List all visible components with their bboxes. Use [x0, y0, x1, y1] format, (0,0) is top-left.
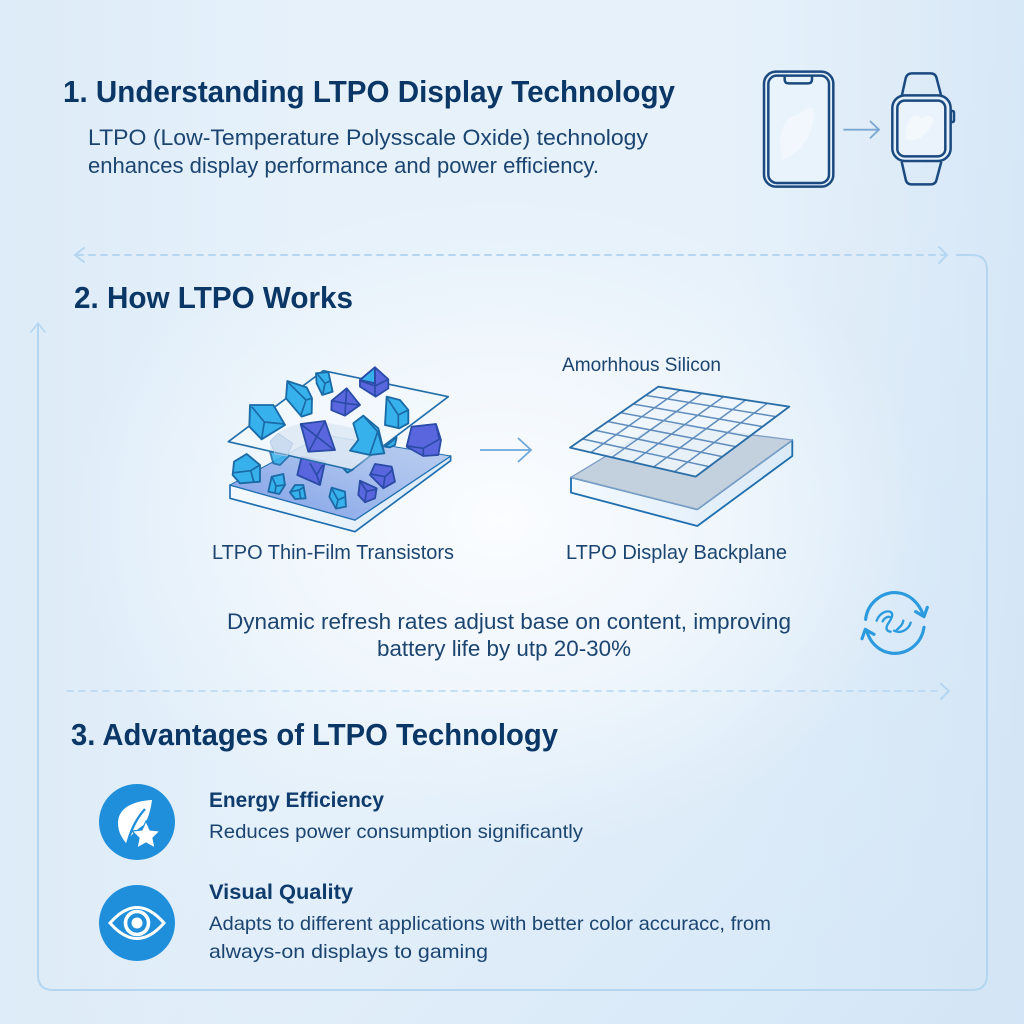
lower slab: [230, 435, 451, 532]
diagram: LTPO crystal layers: [228, 367, 451, 532]
text block: LTPO intro: enhances display performance and power efficiency.: [88, 153, 599, 178]
label: LTPO thin-film transistors: LTPO Thin-Film Transistors: [212, 542, 454, 564]
icon: phone: [764, 72, 833, 187]
crystals on upper sheet: [249, 367, 441, 456]
title: section 2: 2. How LTPO Works: [74, 280, 353, 315]
text block: energy efficiency: Energy Efficiency: [209, 789, 384, 812]
diagram: silicon backplane layers: [570, 387, 792, 526]
text block: visual quality: Adapts to different applications with better color accuracc, from: [209, 913, 771, 935]
title: section 3: 3. Advantages of LTPO Technology: [71, 717, 559, 752]
text block: energy efficiency: Reduces power consumption significantly: [209, 821, 583, 843]
text block: dynamic refresh rates: Dynamic refresh rates adjust base on content, improving: [227, 609, 791, 634]
text block: visual quality: Visual Quality: [209, 881, 353, 904]
text block: dynamic refresh rates: [227, 609, 791, 661]
icon: eye: [99, 885, 175, 961]
arrow: phone to watch: [843, 121, 879, 138]
grid sheet: [570, 387, 789, 477]
title: section 1: 1. Understanding LTPO Display Technology: [63, 74, 676, 109]
arrow: crystals to backplane: [480, 438, 531, 462]
icon: watch: [892, 73, 954, 184]
label: LTPO display backplane: LTPO Display Backplane: [566, 542, 787, 564]
section frame with arrows: [31, 247, 987, 990]
text block: LTPO intro: LTPO (Low-Temperature Polysscale Oxide) technology: [88, 125, 648, 150]
icon: phone to watch: [764, 72, 954, 187]
upper translucent sheet: [228, 371, 448, 470]
label: amorphous silicon: Amorhhous Silicon: [562, 354, 721, 376]
text block: visual quality: always-on displays to gaming: [209, 941, 488, 963]
text block: LTPO intro: [88, 125, 648, 178]
icon: refresh cycle: [862, 593, 927, 653]
text block: visual quality: [209, 881, 771, 963]
lower slab: [571, 423, 792, 526]
text block: energy efficiency: [209, 789, 583, 843]
text block: dynamic refresh rates: battery life by utp 20-30%: [377, 636, 631, 661]
icon: leaf and star: [99, 784, 175, 860]
crystals on lower slab: [233, 437, 397, 509]
